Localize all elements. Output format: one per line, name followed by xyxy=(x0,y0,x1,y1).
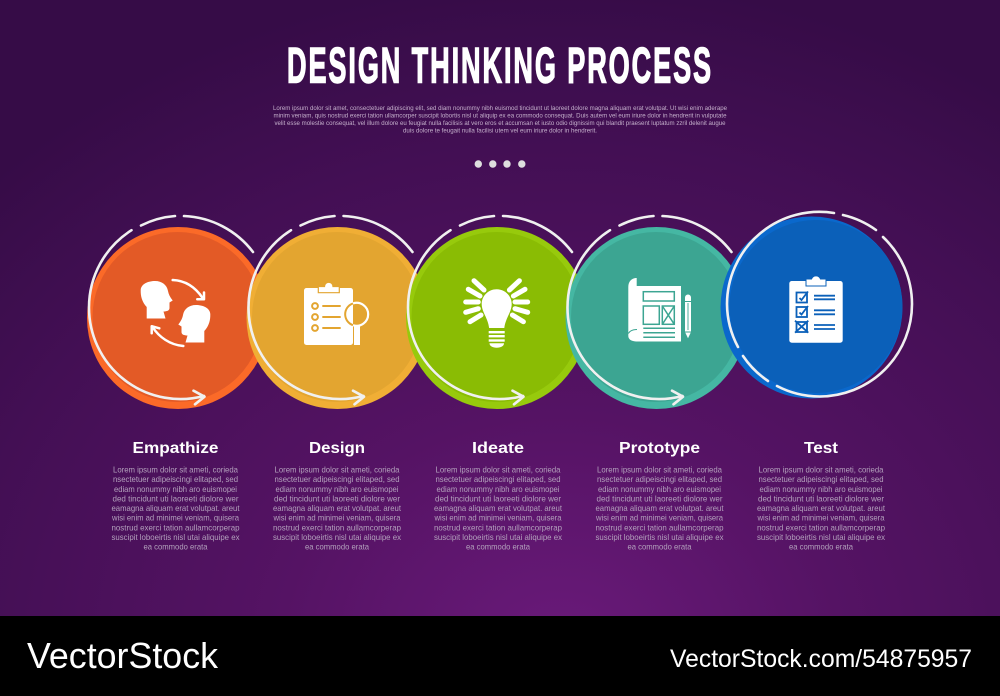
icon: wireframe blueprint and pencil xyxy=(628,278,691,342)
description: ded tincidunt uti laoreeti diolore wer xyxy=(758,494,884,504)
step: prototype text xyxy=(595,440,724,552)
description: nsectetuer adipeiscingi elitaped, sed xyxy=(274,475,400,484)
step: empathize text xyxy=(111,440,240,552)
description: nostrud exerci tation aullamcorperap xyxy=(757,523,885,532)
description xyxy=(595,466,724,552)
panel: test circle xyxy=(720,212,912,398)
description: ea commodo erata xyxy=(305,543,369,552)
icon: clipboard with magnifier xyxy=(304,282,368,345)
description: ediam nonummy nibh aro euismopei xyxy=(114,485,237,494)
description: nsectetuer adipeiscingi elitaped, sed xyxy=(758,475,884,484)
description xyxy=(111,466,240,552)
description: wisi enim ad minimei veniam, quisera xyxy=(434,514,562,523)
description: nostrud exerci tation aullamcorperap xyxy=(596,523,724,532)
description: ediam nonummy nibh aro euismopei xyxy=(276,485,399,494)
ring arrow xyxy=(568,216,732,404)
heading: Test xyxy=(804,440,839,457)
description: nsectetuer adipeiscingi elitaped, sed xyxy=(597,475,722,484)
description: ded tincidunt uti laoreeti diolore wer xyxy=(596,494,723,504)
description: ded tincidunt uti laoreeti diolore wer xyxy=(435,494,561,504)
description: nostrud exerci tation aullamcorperap xyxy=(434,523,562,532)
heading: Empathize xyxy=(132,440,219,457)
panel: ideate circle xyxy=(406,216,588,409)
description: Lorem ipsum dolor sit ameti, corieda xyxy=(436,466,561,475)
description: Lorem ipsum dolor sit ameti, corieda xyxy=(597,466,722,475)
intro text block: Lorem ipsum dolor sit amet, consectetuer adipiscing elit, sed diam nonummy nibh euismod tincidunt ut laoreet dolore magna aliquam erat volutpat. Ut wisi enim aderape xyxy=(273,105,727,112)
description: ea commodo erata xyxy=(144,543,208,552)
description: nostrud exerci tation aullamcorperap xyxy=(273,523,401,532)
description: ded tincidunt uti laoreeti diolore wer xyxy=(274,494,400,504)
description: eamagna aliquam erat volutpat. areut xyxy=(757,504,886,513)
description: wisi enim ad minimei veniam, quisera xyxy=(757,514,885,523)
heading: Prototype xyxy=(619,440,700,457)
icon: light bulb xyxy=(466,281,528,348)
description: nsectetuer adipeiscingi elitaped, sed xyxy=(436,475,560,484)
ring arrow xyxy=(248,216,412,404)
description: Lorem ipsum dolor sit ameti, corieda xyxy=(758,466,884,475)
step: design text xyxy=(273,440,402,552)
heading: Design xyxy=(309,440,365,457)
description: ediam nonummy nibh aro euismopei xyxy=(436,485,560,494)
description xyxy=(434,466,563,552)
description: suscipit loboeirtis nisl utai aliquipe ex xyxy=(112,533,240,542)
description: Lorem ipsum dolor sit ameti, corieda xyxy=(113,466,238,475)
icon: two heads exchanging xyxy=(141,280,210,346)
description: Lorem ipsum dolor sit ameti, corieda xyxy=(274,466,400,475)
intro text block: minim veniam, quis nostrud exerci tation ullamcorper suscipit lobortis nisl ut aliquip ex ea commodo consequat. Duis autem vel eum iriure dolor in hendrerit in vulputate xyxy=(274,113,727,120)
description: ea commodo erata xyxy=(628,543,692,552)
ring arrow xyxy=(408,216,572,404)
description xyxy=(273,466,402,552)
description: eamagna aliquam erat volutpat. areut xyxy=(273,504,402,513)
description: wisi enim ad minimei veniam, quisera xyxy=(595,514,723,523)
description: ea commodo erata xyxy=(789,543,853,552)
footer bar xyxy=(0,616,1000,696)
dashed ring xyxy=(727,212,912,396)
footer logo text: VectorStock xyxy=(27,635,219,676)
description: eamagna aliquam erat volutpat. areut xyxy=(434,504,563,513)
description: eamagna aliquam erat volutpat. areut xyxy=(112,504,240,513)
intro text block xyxy=(273,105,727,134)
step: test text xyxy=(757,440,886,552)
description: ded tincidunt uti laoreeti diolore wer xyxy=(112,494,239,504)
heading: Ideate xyxy=(472,440,524,457)
description: ea commodo erata xyxy=(466,543,530,552)
description: suscipit loboeirtis nisl utai aliquipe ex xyxy=(434,533,562,542)
description: wisi enim ad minimei veniam, quisera xyxy=(111,514,239,523)
description: ediam nonummy nibh aro euismopei xyxy=(760,485,883,494)
intro text block: velit esse molestie consequat, vel illum dolore eu feugiat nulla facilisis at vero eros et accumsan et iusto odio dignissim qui blandit praesent luptatum zzril delenit augue xyxy=(274,120,726,127)
intro text block: duis dolore te feugait nulla facilisi utem vel eum iriure dolor in hendrerit. xyxy=(403,128,597,134)
panel: empathize circle xyxy=(87,216,269,409)
description: nsectetuer adipeiscingi elitaped, sed xyxy=(113,475,238,484)
ring arrow xyxy=(89,216,253,404)
panel: design circle xyxy=(246,216,428,409)
description: suscipit loboeirtis nisl utai aliquipe ex xyxy=(757,533,885,542)
description: suscipit loboeirtis nisl utai aliquipe ex xyxy=(596,533,724,542)
description: nostrud exerci tation aullamcorperap xyxy=(112,523,240,532)
description xyxy=(757,466,886,552)
step: ideate text xyxy=(434,440,563,552)
description: wisi enim ad minimei veniam, quisera xyxy=(273,514,401,523)
panel: prototype circle xyxy=(566,216,748,409)
description: eamagna aliquam erat volutpat. areut xyxy=(596,504,724,513)
pagination dots xyxy=(475,160,526,168)
footer image id: VectorStock.com/54875957 xyxy=(670,645,972,673)
description: suscipit loboeirtis nisl utai aliquipe ex xyxy=(273,533,401,542)
description: ediam nonummy nibh aro euismopei xyxy=(598,485,721,494)
icon: checklist clipboard xyxy=(789,276,843,343)
